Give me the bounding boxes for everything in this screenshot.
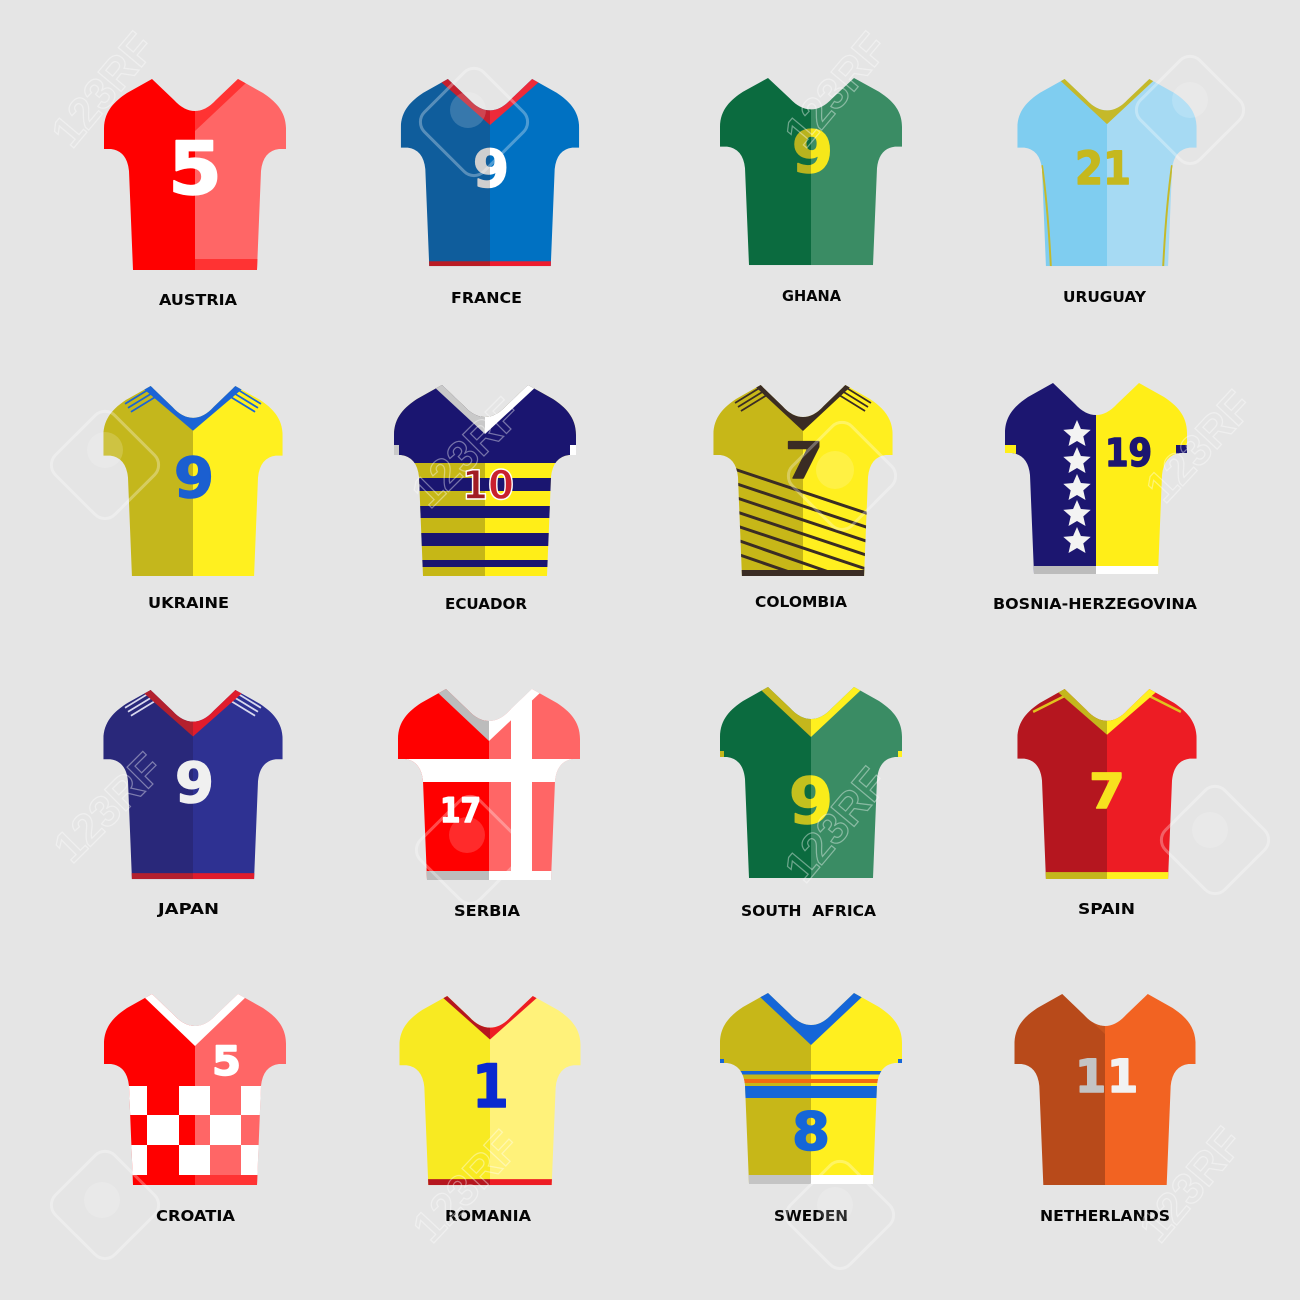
- watermarks: 123RF: [42, 24, 165, 156]
- shirt body: [720, 993, 902, 1184]
- watermarks: 123RF: [1136, 382, 1262, 512]
- label: Ukraine: UKRAINE: [148, 594, 229, 612]
- jersey: Ukraine: [103, 386, 283, 576]
- label: Colombia: COLOMBIA: [755, 593, 847, 611]
- shirt body: [720, 78, 902, 266]
- label: South Africa: SOUTH AFRICA: [741, 902, 876, 920]
- shirt body: [1017, 689, 1197, 879]
- label: Sweden: SWEDEN: [774, 1207, 848, 1225]
- number 11: 11: [1075, 1050, 1138, 1103]
- shirt body: [1014, 994, 1196, 1185]
- watermarks: 123RF: [403, 1122, 529, 1252]
- number 9: 9: [789, 765, 833, 838]
- jersey: France: [400, 79, 580, 266]
- label: Japan: JAPAN: [157, 900, 219, 918]
- watermarks: 123RF: [402, 389, 530, 517]
- number 8: 8: [792, 1102, 830, 1163]
- number 7: 7: [785, 432, 823, 490]
- number 21: 21: [1075, 142, 1131, 195]
- label: Croatia: CROATIA: [156, 1207, 235, 1225]
- label: Uruguay: URUGUAY: [1063, 288, 1147, 306]
- number 1: 1: [472, 1052, 509, 1122]
- number 5: 5: [212, 1039, 241, 1085]
- jersey: South Africa: [720, 687, 902, 878]
- jersey: Spain: [1017, 689, 1197, 879]
- shirt body: [720, 687, 902, 878]
- label: Netherlands: NETHERLANDS: [1040, 1207, 1170, 1225]
- shirt body: [400, 996, 580, 1186]
- jersey: Ghana: [720, 78, 902, 266]
- number 19: 19: [1105, 431, 1152, 475]
- shirt body: [104, 79, 286, 270]
- jersey: Ecuador: [394, 385, 576, 576]
- jersey: Serbia: [398, 689, 580, 880]
- jersey: Sweden: [720, 993, 902, 1184]
- number 9: 9: [175, 751, 214, 815]
- shirt body: [1018, 79, 1196, 266]
- label: Spain: SPAIN: [1078, 900, 1135, 918]
- shirt body: [103, 386, 283, 576]
- number 7: 7: [1089, 764, 1125, 820]
- shirt body: [1005, 383, 1187, 574]
- jersey: Croatia: [104, 994, 286, 1185]
- label: Ecuador: ECUADOR: [445, 595, 527, 613]
- number 10: 10: [462, 463, 514, 509]
- jersey: Bosnia-Herzegovina: [1005, 383, 1187, 574]
- jersey: Austria: [104, 79, 286, 270]
- watermarks: 123RF: [775, 759, 898, 891]
- number 9: 9: [473, 140, 509, 200]
- jersey: Netherlands: [1014, 994, 1196, 1185]
- label: Romania: ROMANIA: [445, 1207, 531, 1225]
- shirt body: [394, 385, 576, 576]
- shirt body: [713, 385, 893, 576]
- shirt body: [104, 994, 286, 1185]
- label: France: FRANCE: [451, 289, 522, 307]
- shirt body: [103, 690, 283, 880]
- jersey: Japan: [103, 690, 283, 880]
- number 17: 17: [440, 791, 481, 831]
- watermarks: 123RF: [1130, 1119, 1253, 1251]
- number 9: 9: [174, 446, 214, 510]
- jersey: Colombia: [713, 385, 893, 576]
- jersey: Uruguay: [1018, 79, 1196, 266]
- number 5: 5: [168, 127, 222, 212]
- jersey: Romania: [400, 996, 580, 1186]
- shirt body: [400, 79, 580, 266]
- watermarks: 123RF: [775, 24, 898, 156]
- shirt body: [398, 689, 580, 880]
- watermarks: 123RF: [44, 744, 172, 872]
- label: Serbia: SERBIA: [454, 902, 520, 920]
- label: Bosnia-Herzegovina: BOSNIA-HERZEGOVINA: [993, 595, 1197, 613]
- stars: [1063, 420, 1091, 553]
- label: Ghana: GHANA: [782, 287, 841, 305]
- label: Austria: AUSTRIA: [159, 291, 237, 309]
- number 9: 9: [792, 118, 833, 186]
